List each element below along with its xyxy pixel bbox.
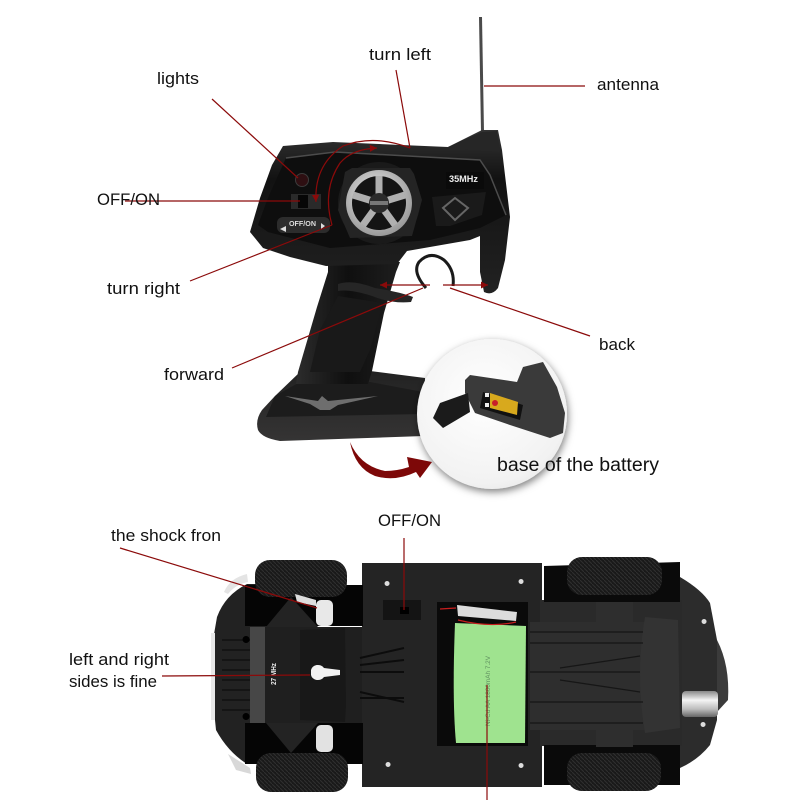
arc: turn right arrow [328, 148, 377, 225]
car front body [213, 584, 300, 764]
off on plate [277, 217, 330, 233]
chassis screws [385, 579, 707, 768]
circle background [417, 339, 567, 489]
shock absorber bottom [316, 725, 333, 752]
lights LED [296, 174, 308, 186]
label: forward: forward [164, 365, 224, 384]
label: back: back [599, 335, 635, 354]
front wheel well top [245, 585, 363, 626]
line: battery [486, 685, 488, 800]
rear panel ribs [530, 632, 643, 723]
front grille ribs [222, 640, 250, 710]
rear panel [530, 622, 645, 730]
label: off on: OFF/ON [97, 190, 160, 209]
base wings emblem [285, 396, 378, 410]
label: antenna: antenna [597, 75, 660, 94]
35MHz label [446, 172, 484, 189]
callout circle: base of the battery [417, 339, 567, 489]
car rear body [660, 575, 717, 770]
battery contacts [485, 393, 489, 407]
head trim highlight [286, 152, 506, 215]
line: turn right [190, 225, 332, 281]
off on plate: OFF/ON [289, 221, 316, 228]
front plate [250, 627, 362, 723]
front grey strip [250, 627, 265, 723]
battery door [433, 393, 470, 428]
front right wheel [256, 753, 348, 792]
battery red dot [492, 400, 498, 406]
battery base shell [465, 362, 565, 438]
arrow: back direction [443, 284, 488, 286]
front chrome bumper top [224, 574, 248, 594]
rear left wheel [567, 557, 662, 595]
27 MHz label: 27 MHz [271, 663, 278, 685]
rear wheel well top [544, 562, 680, 602]
axle bottom [596, 729, 633, 747]
rear panel flare [640, 617, 680, 733]
head inner face [258, 152, 506, 248]
battery wire [440, 608, 516, 625]
grip panel [310, 296, 383, 372]
line: turn left [396, 70, 410, 148]
chassis rear section [540, 600, 682, 746]
label: left and right sides is fine [69, 650, 169, 691]
label: the shock fron: the shock fron [111, 526, 221, 545]
35MHz label: 35MHz [449, 174, 479, 184]
tail fin [448, 131, 500, 152]
controller head shell [250, 130, 510, 293]
throttle trigger loop [417, 255, 453, 288]
line: lights [212, 99, 298, 178]
annotation lines [120, 70, 590, 800]
label: lights: lights [157, 69, 199, 88]
battery connector [457, 605, 517, 621]
label: base of the battery: base of the battery [497, 455, 660, 476]
line: forward [232, 288, 423, 368]
power switch slot [383, 600, 421, 620]
chassis [362, 563, 542, 787]
label: car off on: OFF/ON [378, 511, 441, 530]
battery compartment [437, 602, 528, 746]
axle top [596, 602, 633, 622]
label: left and right sides is fine: left and right [69, 650, 169, 669]
car underside [211, 557, 728, 792]
line: left and right [162, 675, 310, 676]
battery pack [454, 623, 526, 743]
line: back [450, 288, 590, 336]
label: turn right: turn right [107, 279, 180, 298]
keyhole [311, 665, 340, 680]
curved arrow to battery circle [350, 442, 432, 478]
front left wheel [255, 560, 347, 597]
battery slot [480, 392, 523, 420]
exhaust [682, 691, 718, 717]
front chrome bumper bottom [228, 754, 251, 774]
controller: antenna [479, 17, 484, 132]
front bumper strip [211, 633, 215, 720]
controller grip [296, 262, 400, 384]
label: turn left: turn left [369, 45, 431, 64]
rear wheel well bottom [544, 745, 680, 785]
suspension upper triangle [266, 597, 318, 627]
forward trigger [338, 282, 413, 302]
chassis ribs [360, 648, 404, 702]
line: antenna [484, 85, 585, 87]
battery pack text: Ni-Cd AA 1800mAh 7.2V [486, 656, 492, 726]
arc: turn left arrow [316, 140, 410, 202]
front steering plate [300, 628, 346, 722]
controller: remote transmitter [250, 130, 510, 441]
line: car off on [403, 538, 405, 610]
front wheel well bottom [245, 723, 363, 764]
shock absorber top [316, 600, 333, 626]
line: the shock front [120, 548, 317, 608]
rear bulge [717, 640, 728, 712]
base top surface [266, 382, 423, 417]
power switch [291, 194, 321, 209]
front holes [243, 636, 250, 720]
gold battery [490, 393, 518, 415]
rear right wheel [567, 753, 661, 791]
shock arm top [295, 594, 316, 606]
steering wheel [338, 162, 422, 244]
logo panel [432, 192, 486, 226]
controller base [257, 371, 425, 441]
line: off on [125, 200, 300, 202]
arrow: forward direction [380, 284, 430, 286]
suspension lower triangle [266, 723, 318, 753]
label: left and right sides is fine: sides is fine [69, 672, 157, 691]
